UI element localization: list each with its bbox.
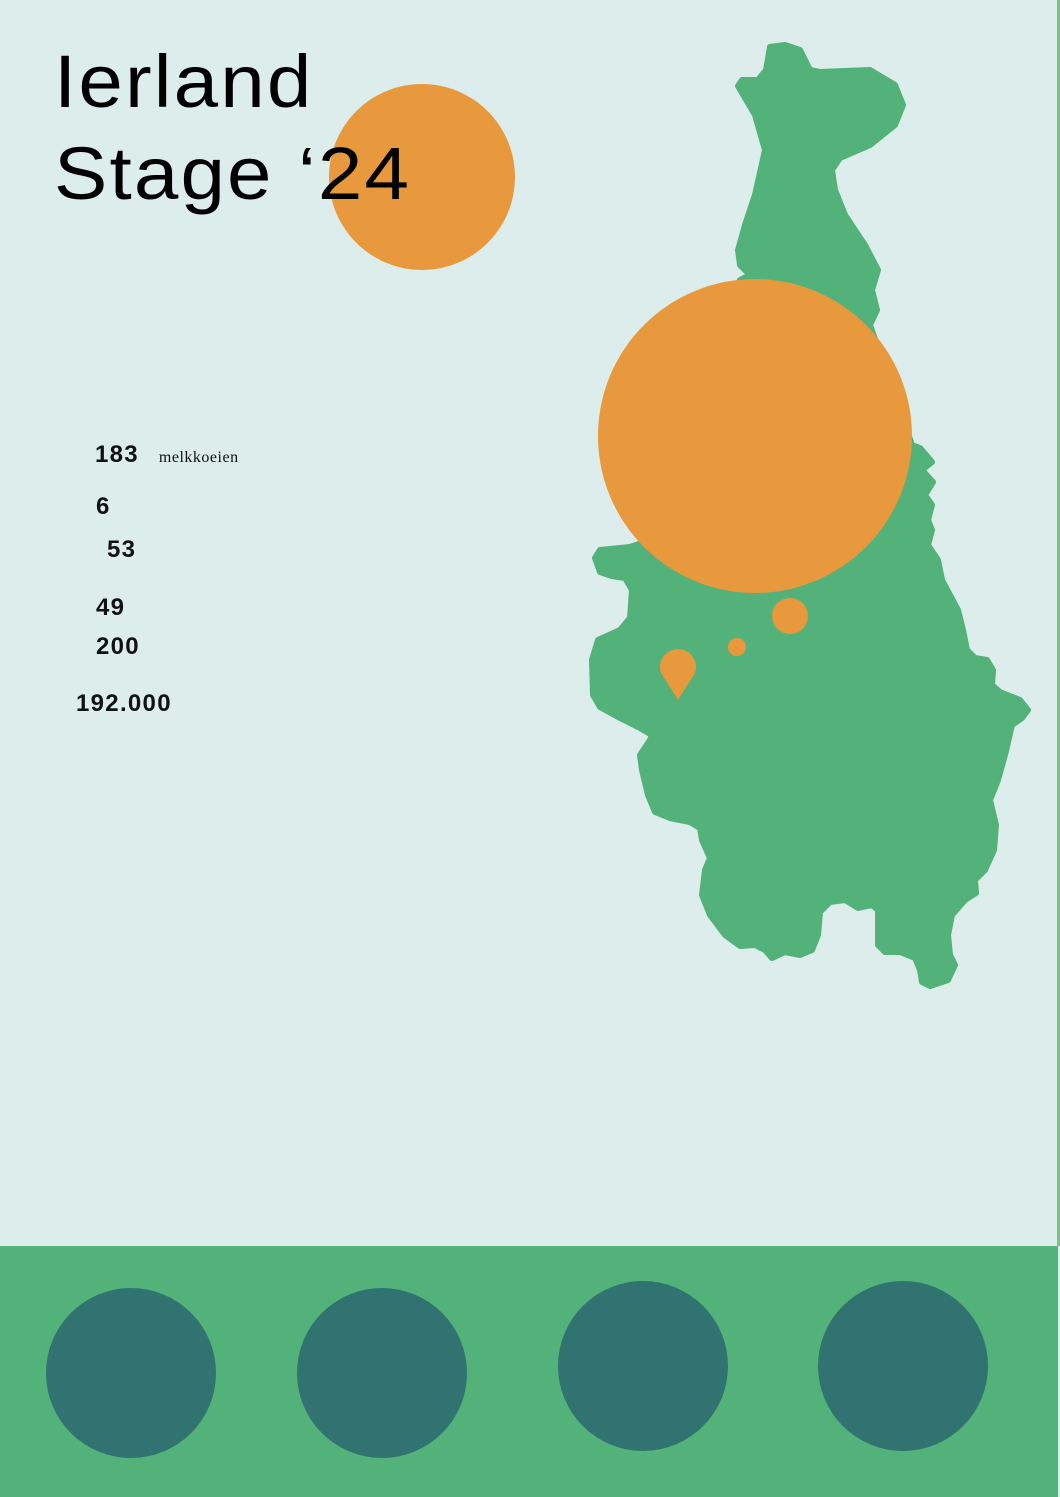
stats: 183 melkkoeien <box>95 441 239 468</box>
small orange dots <box>728 598 808 656</box>
top orange circle <box>329 84 515 270</box>
right edge strip <box>1057 0 1060 1246</box>
title: Stage ‘24 <box>54 132 411 215</box>
bottom band <box>0 1246 1058 1497</box>
stats: 49 <box>96 594 125 621</box>
big orange circle <box>598 279 912 593</box>
stats: 192.000 <box>76 690 172 717</box>
stats: 6 <box>96 493 111 520</box>
title: Ierland <box>54 40 313 123</box>
stats <box>76 441 239 717</box>
map: Ireland <box>592 45 1028 986</box>
stats: 53 <box>107 536 136 563</box>
icon: location pin <box>660 649 696 700</box>
stats: 200 <box>96 633 140 660</box>
title <box>54 40 411 215</box>
